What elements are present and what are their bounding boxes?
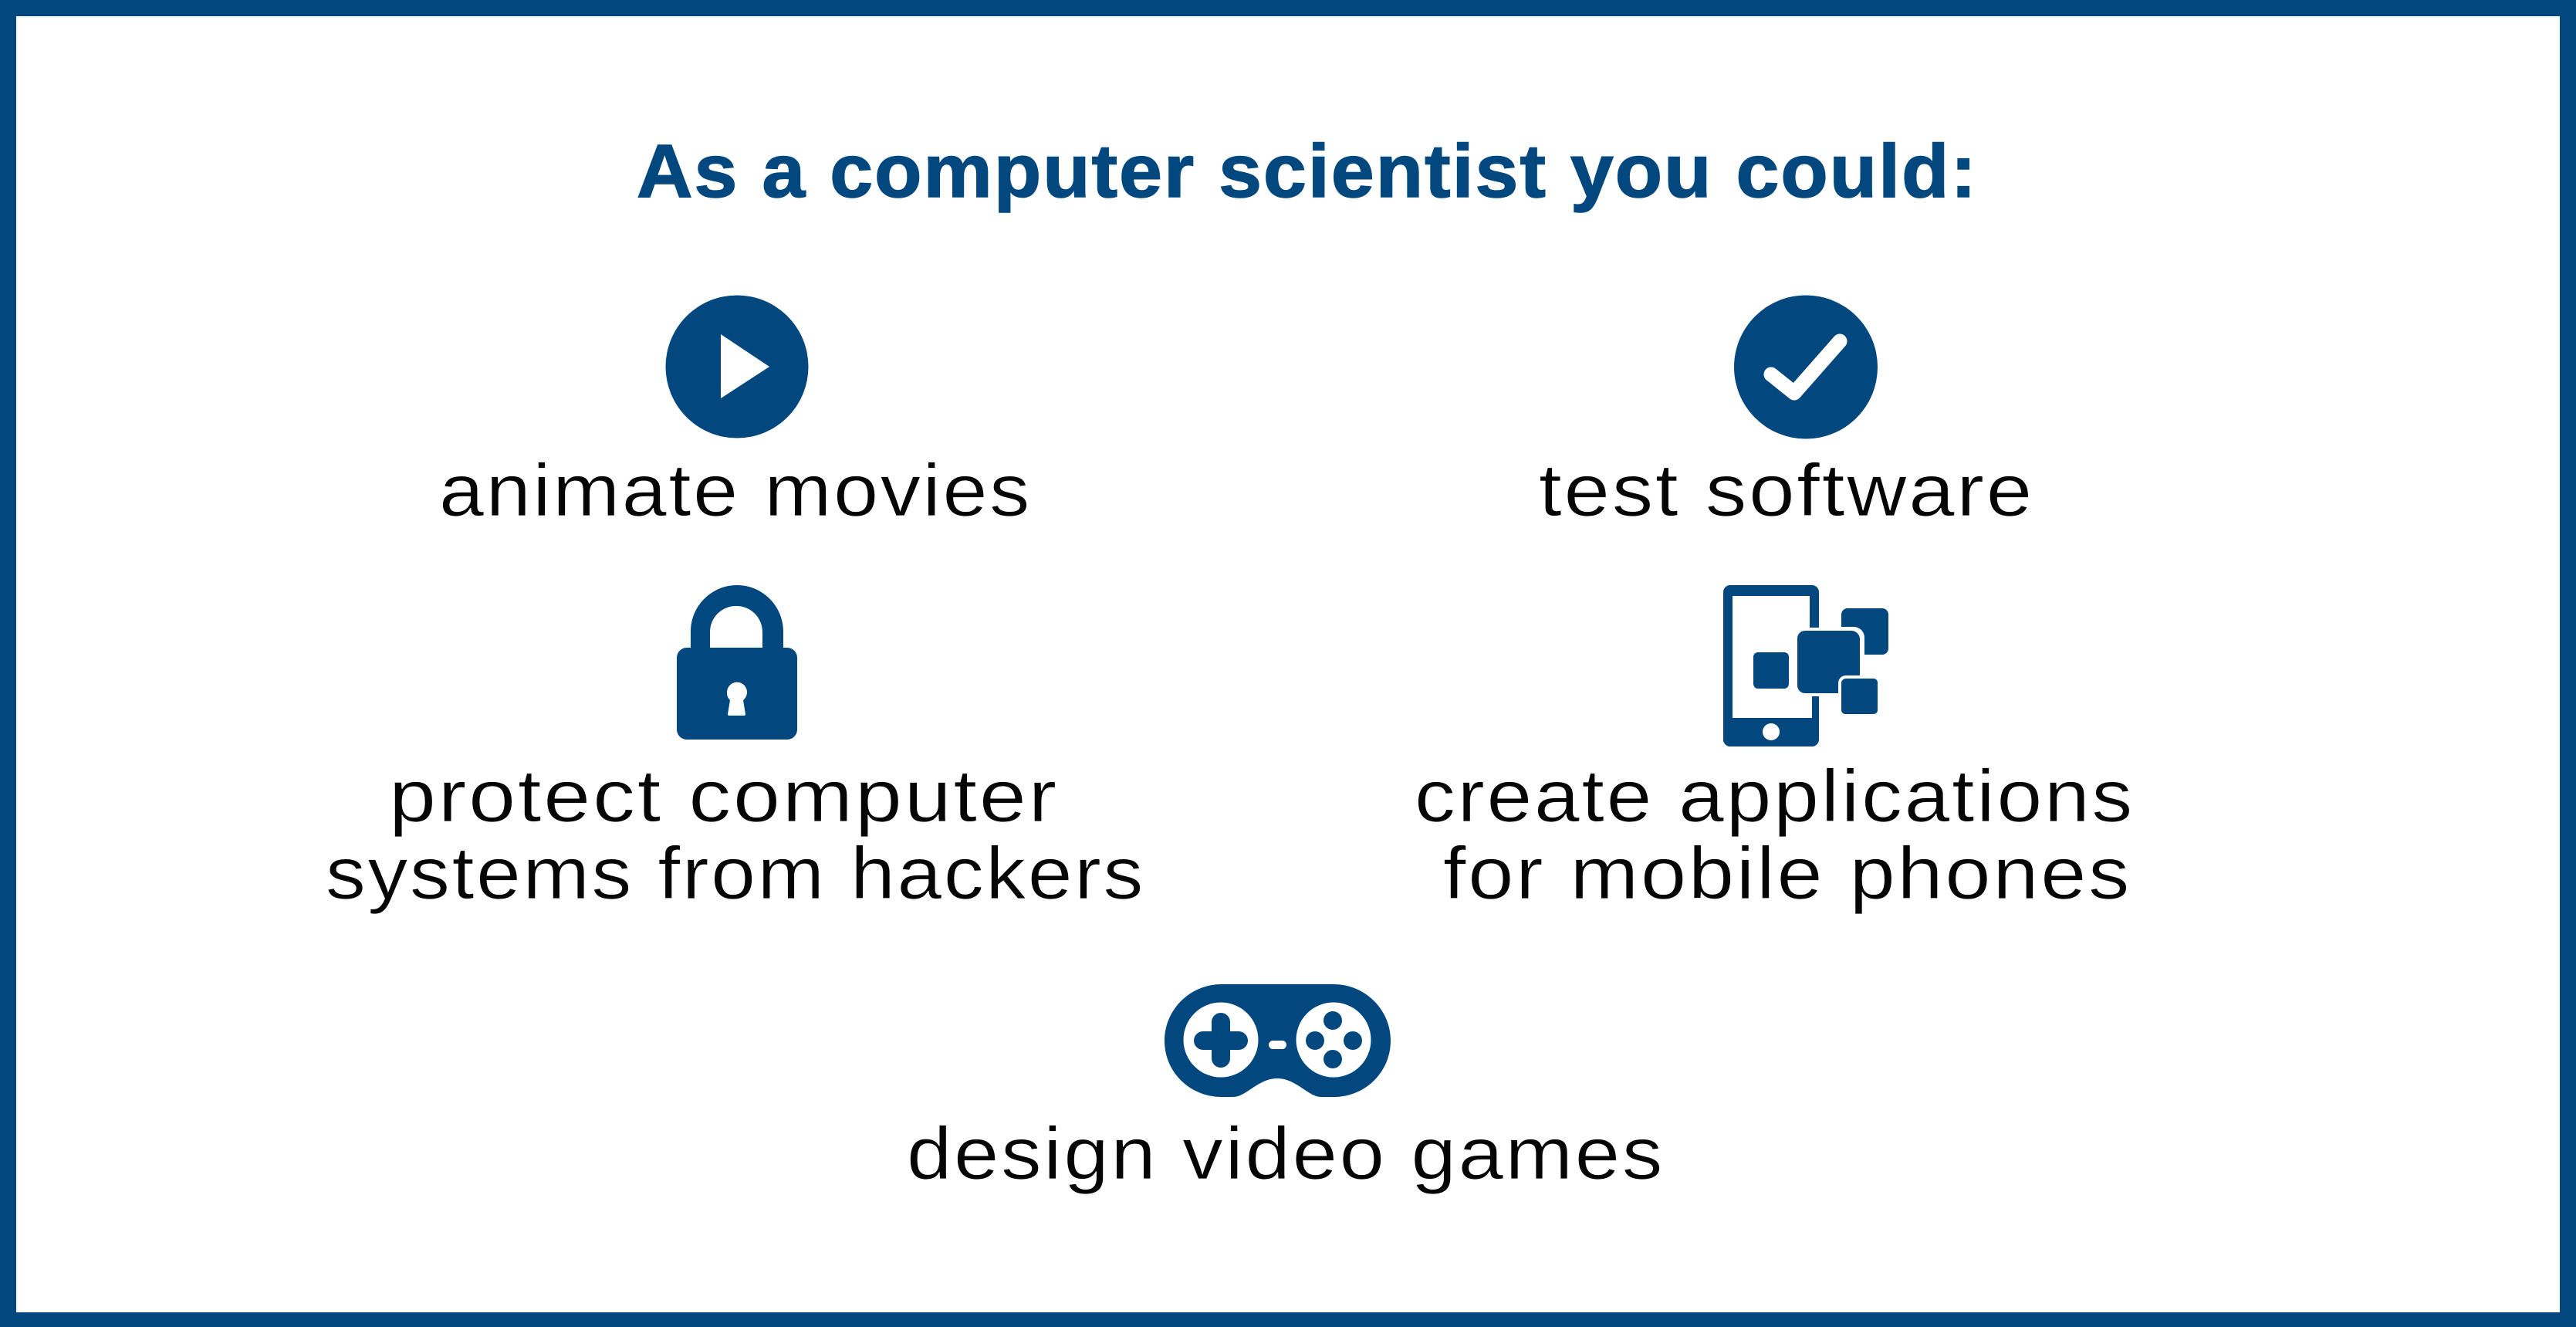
label: design video games: design video games (907, 1112, 1665, 1195)
label: protect computer systems from hackers: systems from hackers (326, 832, 1145, 915)
item: design video games (907, 984, 1665, 1195)
label: create applications for mobile phones: create applications (1415, 755, 2135, 838)
label: create applications for mobile phones (1415, 755, 2135, 915)
icon: play button (665, 295, 809, 438)
item: test software (1539, 295, 2034, 532)
label: create applications for mobile phones: for mobile phones (1443, 832, 2131, 915)
label: protect computer systems from hackers (326, 755, 1145, 915)
label: animate movies: animate movies (439, 449, 1032, 532)
label: test software: test software (1539, 449, 2034, 532)
icon: check mark (1734, 295, 1878, 438)
icon: padlock (677, 585, 797, 740)
icon: game controller (1165, 984, 1391, 1097)
item: create applications (1415, 585, 2135, 915)
label: protect computer systems from hackers: protect computer (389, 755, 1059, 838)
item: protect computer systems (326, 585, 1145, 915)
icon: phone with app tiles (1723, 585, 1888, 746)
item: animate movies (439, 295, 1032, 532)
title: As a computer scientist you could: (637, 129, 1978, 213)
